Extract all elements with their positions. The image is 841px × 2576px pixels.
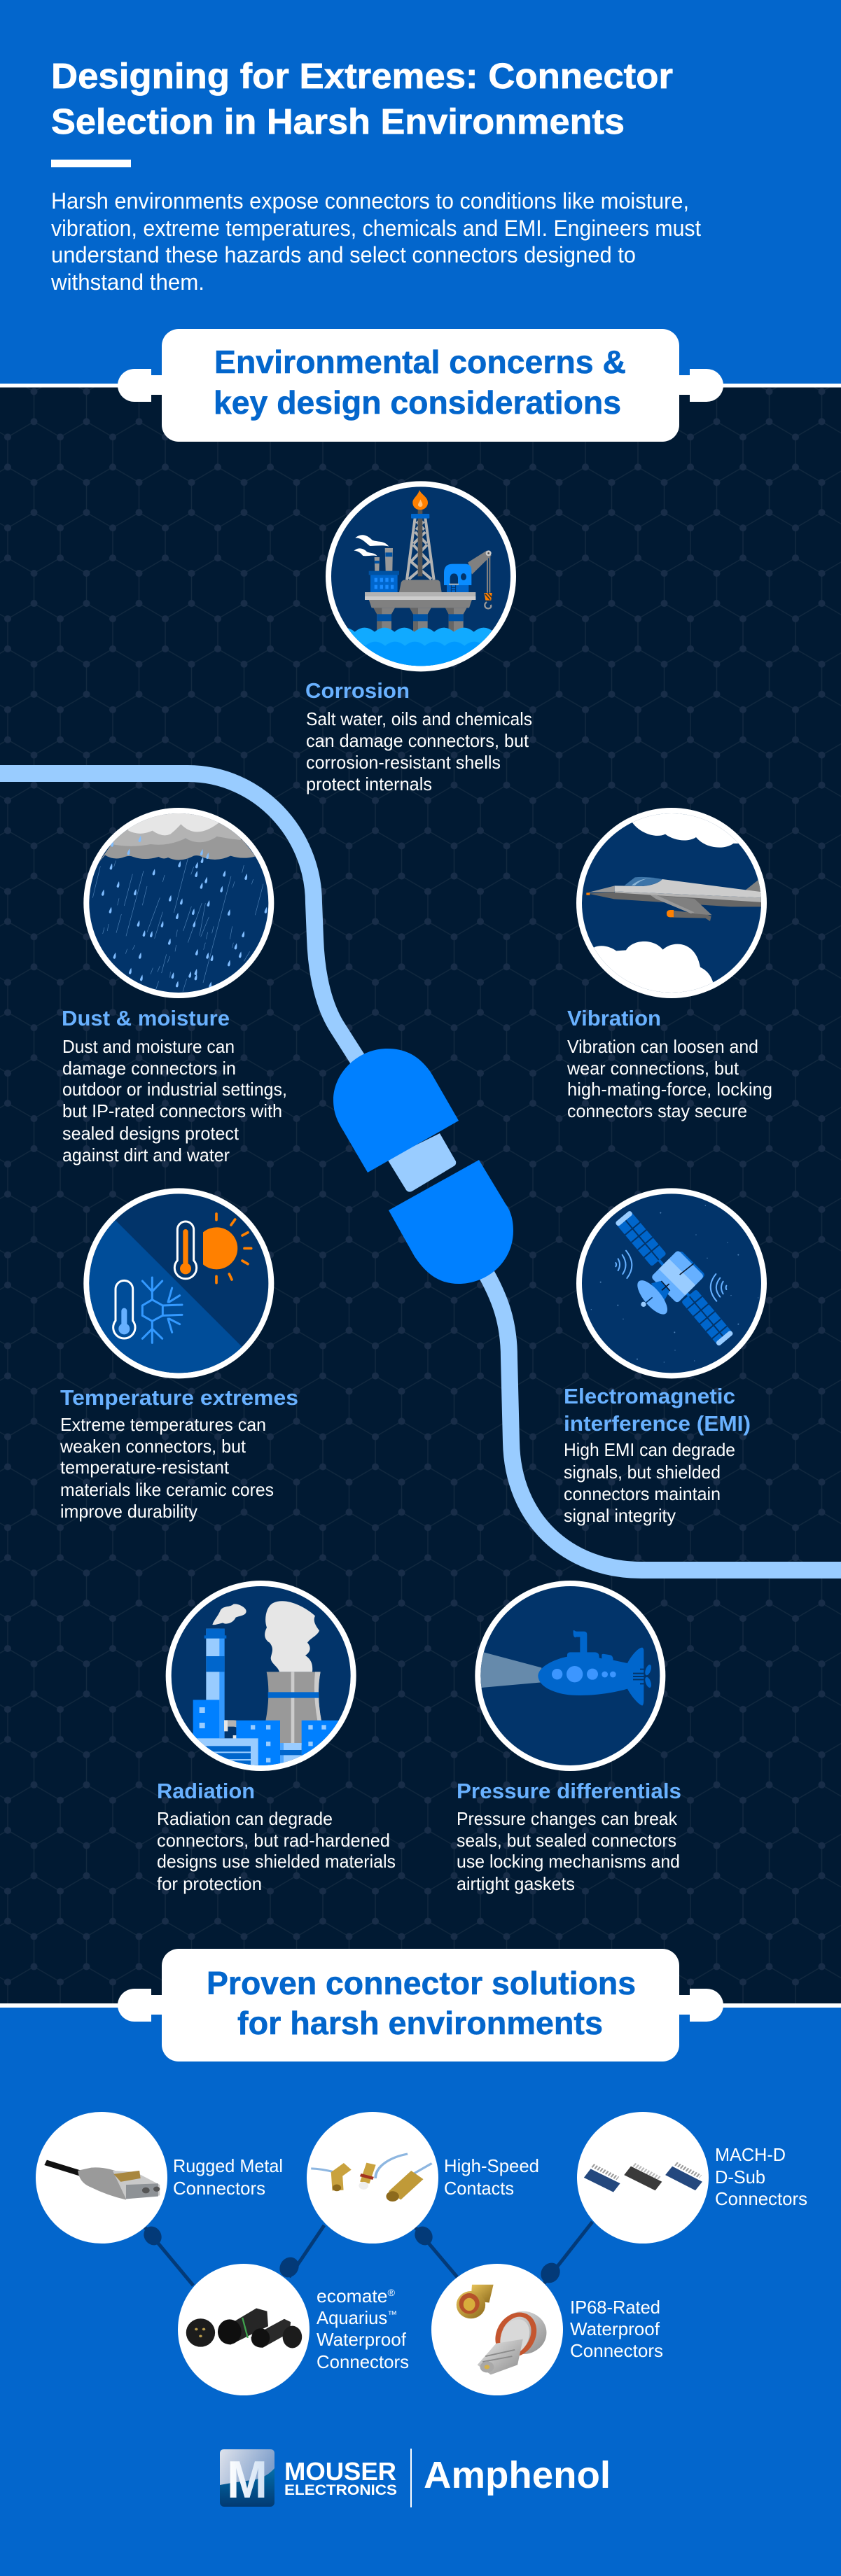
icon: submarine <box>474 1581 665 1771</box>
text: dust and moisture description: Dust and moisture can <box>62 1036 235 1057</box>
logo divider <box>410 2449 412 2507</box>
title: Selection in Harsh Environments <box>51 102 625 141</box>
product circle with gold and silver connectors <box>431 2264 563 2395</box>
product circle with black connectors <box>178 2264 310 2395</box>
text: corrosion description: protect internals <box>306 774 432 794</box>
text: temperature description: temperature-resistant <box>60 1457 230 1478</box>
text: temperature description <box>60 1414 274 1522</box>
text: EMI description <box>564 1439 735 1526</box>
text: EMI description: signals, but shielded <box>564 1462 721 1483</box>
label: ecomate Aquarius waterproof connectors <box>317 2286 409 2372</box>
panel: pressure differentials <box>457 1581 681 1894</box>
logo: Mouser Electronics: ELECTRONICS <box>284 2482 397 2498</box>
text: dust and moisture description: against dirt and water <box>62 1144 230 1166</box>
panel: vibration <box>567 807 772 1121</box>
intro paragraph: withstand them. <box>50 270 204 295</box>
text: EMI description: signal integrity <box>564 1505 676 1526</box>
intro paragraph: Harsh environments expose connectors to conditions like moisture, <box>51 188 689 214</box>
label: ecomate Aquarius waterproof connectors: ecomate <box>317 2286 387 2306</box>
label: IP68-rated waterproof connectors: Waterproof <box>570 2318 660 2339</box>
heading: temperature extremes: Temperature extremes <box>60 1385 298 1410</box>
label: ecomate Aquarius waterproof connectors: Aquarius <box>317 2307 389 2328</box>
text: radiation description: designs use shielded materials <box>157 1851 396 1872</box>
title: Designing for Extremes: Connector <box>51 56 673 96</box>
label: high-speed contacts <box>444 2155 539 2199</box>
logo: Mouser Electronics: M <box>227 2450 267 2509</box>
title accent bar <box>51 160 131 167</box>
label: IP68-rated waterproof connectors <box>570 2297 663 2361</box>
label: high-speed contacts: Contacts <box>444 2178 514 2199</box>
product: IP68-rated waterproof connectors <box>431 2264 663 2395</box>
section heading: environmental concerns: Environmental concerns & <box>214 344 626 380</box>
intro paragraph: vibration, extreme temperatures, chemicals and EMI. Engineers must <box>51 216 701 241</box>
label: ecomate Aquarius waterproof connectors: Waterproof <box>317 2329 407 2350</box>
product: high-speed contacts <box>307 2112 539 2244</box>
label: rugged metal connectors: Connectors <box>173 2178 265 2199</box>
text: pressure description: airtight gaskets <box>457 1873 575 1894</box>
text: radiation description: connectors, but rad-hardened <box>157 1830 390 1851</box>
text: EMI description: connectors maintain <box>564 1483 721 1504</box>
text: corrosion description: can damage connectors, but <box>306 730 529 751</box>
text: temperature description: materials like ceramic cores <box>60 1479 274 1500</box>
text: vibration description <box>567 1036 772 1121</box>
intro paragraph <box>50 188 701 295</box>
text: dust and moisture description: sealed designs protect <box>62 1123 239 1144</box>
intro paragraph: understand these hazards and select connectors designed to <box>51 242 636 267</box>
icon: rain cloud <box>83 805 274 998</box>
label: rugged metal connectors: Rugged Metal <box>173 2155 283 2176</box>
heading: radiation: Radiation <box>157 1779 255 1803</box>
label: ecomate Aquarius waterproof connectors: Connectors <box>317 2351 409 2372</box>
section heading: proven connector solutions: for harsh environments <box>237 2005 603 2041</box>
label: MACH-D D-Sub connectors: MACH-D <box>715 2144 786 2165</box>
text: corrosion description <box>306 708 532 794</box>
text: dust and moisture description: outdoor or industrial settings, <box>62 1079 287 1100</box>
text: radiation description: Radiation can degrade <box>157 1808 333 1829</box>
section heading: environmental concerns: key design considerations <box>214 384 621 421</box>
text: temperature description: Extreme temperatures can <box>60 1414 266 1435</box>
text: dust and moisture description: but IP-rated connectors with <box>62 1100 282 1121</box>
logo: Amphenol: Amphenol <box>424 2454 611 2496</box>
icon: fighter jet <box>576 807 767 1008</box>
text: dust and moisture description <box>62 1036 287 1166</box>
label: ecomate Aquarius waterproof connectors: ® <box>387 2287 396 2298</box>
text: vibration description: high-mating-force, locking <box>567 1079 772 1100</box>
heading: dust and moisture: Dust & moisture <box>62 1006 230 1030</box>
text: corrosion description: corrosion-resistant shells <box>306 752 501 773</box>
panel: radiation <box>157 1581 396 1894</box>
icon: hot and cold thermometers <box>70 1186 275 1380</box>
label: rugged metal connectors <box>173 2155 283 2199</box>
label: IP68-rated waterproof connectors: IP68-Rated <box>570 2297 660 2318</box>
cable and plug connector <box>0 774 841 1570</box>
product: MACH-D D-Sub connectors <box>577 2112 807 2244</box>
label: IP68-rated waterproof connectors: Connectors <box>570 2340 663 2361</box>
heading: electromagnetic interference: interference (EMI) <box>564 1411 751 1436</box>
text: pressure description: seals, but sealed connectors <box>457 1830 676 1851</box>
text: dust and moisture description: damage connectors in <box>62 1058 236 1079</box>
text: radiation description: for protection <box>157 1873 262 1894</box>
logo: Mouser Electronics: MOUSER <box>284 2457 396 2486</box>
label: MACH-D D-Sub connectors: Connectors <box>715 2188 807 2209</box>
product circle with gold contacts <box>307 2112 438 2244</box>
icon: power plant <box>166 1581 356 1771</box>
label: ecomate Aquarius waterproof connectors: ™ <box>387 2309 397 2320</box>
icon: offshore oil rig <box>326 481 516 680</box>
text: vibration description: wear connections, but <box>567 1058 739 1079</box>
panel: dust and moisture <box>62 805 287 1166</box>
heading: electromagnetic interference <box>564 1384 751 1436</box>
text: radiation description <box>157 1808 396 1894</box>
label: MACH-D D-Sub connectors <box>715 2144 807 2209</box>
panel: corrosion <box>305 481 532 794</box>
product circle with photo-like connector <box>36 2112 167 2244</box>
section heading: proven connector solutions: Proven connector solutions <box>207 1965 636 2001</box>
panel: electromagnetic interference <box>564 1188 767 1526</box>
text: vibration description: Vibration can loosen and <box>567 1036 758 1057</box>
label: MACH-D D-Sub connectors: D-Sub <box>715 2166 765 2188</box>
text: pressure description <box>457 1808 680 1894</box>
text: corrosion description: Salt water, oils and chemicals <box>306 708 532 729</box>
heading: electromagnetic interference: Electromagnetic <box>564 1384 735 1408</box>
text: pressure description: Pressure changes can break <box>457 1808 678 1829</box>
logo: Mouser Electronics <box>220 2449 397 2509</box>
section heading: proven connector solutions <box>118 1949 723 2062</box>
icon: satellite <box>576 1188 767 1378</box>
product circle with D-sub connectors <box>577 2112 709 2244</box>
heading: corrosion: Corrosion <box>305 678 410 703</box>
text: pressure description: use locking mechanisms and <box>457 1851 680 1872</box>
label: high-speed contacts: High-Speed <box>444 2155 539 2176</box>
text: EMI description: High EMI can degrade <box>564 1439 735 1460</box>
heading: vibration: Vibration <box>567 1006 661 1030</box>
panel: temperature extremes <box>60 1186 298 1522</box>
text: vibration description: connectors stay secure <box>567 1100 747 1121</box>
product: ecomate Aquarius waterproof connectors <box>178 2264 409 2395</box>
text: temperature description: weaken connectors, but <box>60 1436 246 1457</box>
text: temperature description: improve durability <box>60 1501 197 1522</box>
product: rugged metal connectors <box>36 2112 283 2244</box>
connector links between product circles <box>140 2222 592 2287</box>
heading: pressure differentials: Pressure differentials <box>457 1779 681 1803</box>
title <box>51 56 673 141</box>
section heading: environmental concerns <box>118 329 723 442</box>
